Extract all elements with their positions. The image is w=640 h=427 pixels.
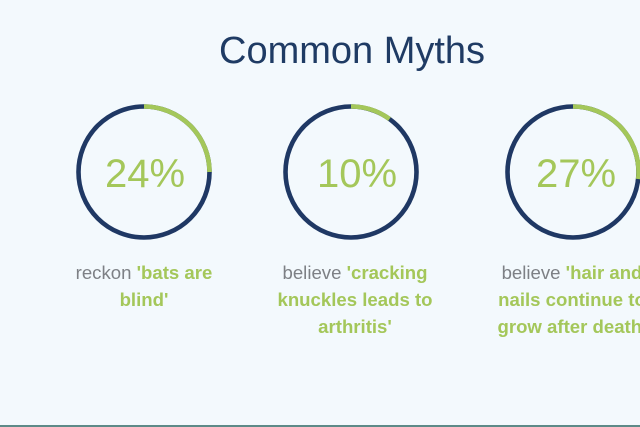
donut: 27% [508,106,639,238]
caption: bats: blind' [120,289,168,310]
bottom border [0,425,640,427]
donut: 10% [286,106,416,238]
caption: knuckles: arthritis' [318,316,392,337]
caption: hair and nails: believe 'hair and [502,262,640,283]
caption: hair and nails [497,262,640,337]
donut: 24%: 24% [105,152,185,196]
donut: 27%: 27% [536,152,616,196]
caption: knuckles: believe 'cracking [282,262,428,283]
title: Common Myths [219,30,485,72]
caption: knuckles [277,262,432,337]
caption: bats [76,262,212,310]
caption: knuckles: knuckles leads to [277,289,432,310]
donut: 10%: 10% [317,152,397,196]
caption: bats: reckon 'bats are [76,262,212,283]
donut: 24% [78,106,210,238]
